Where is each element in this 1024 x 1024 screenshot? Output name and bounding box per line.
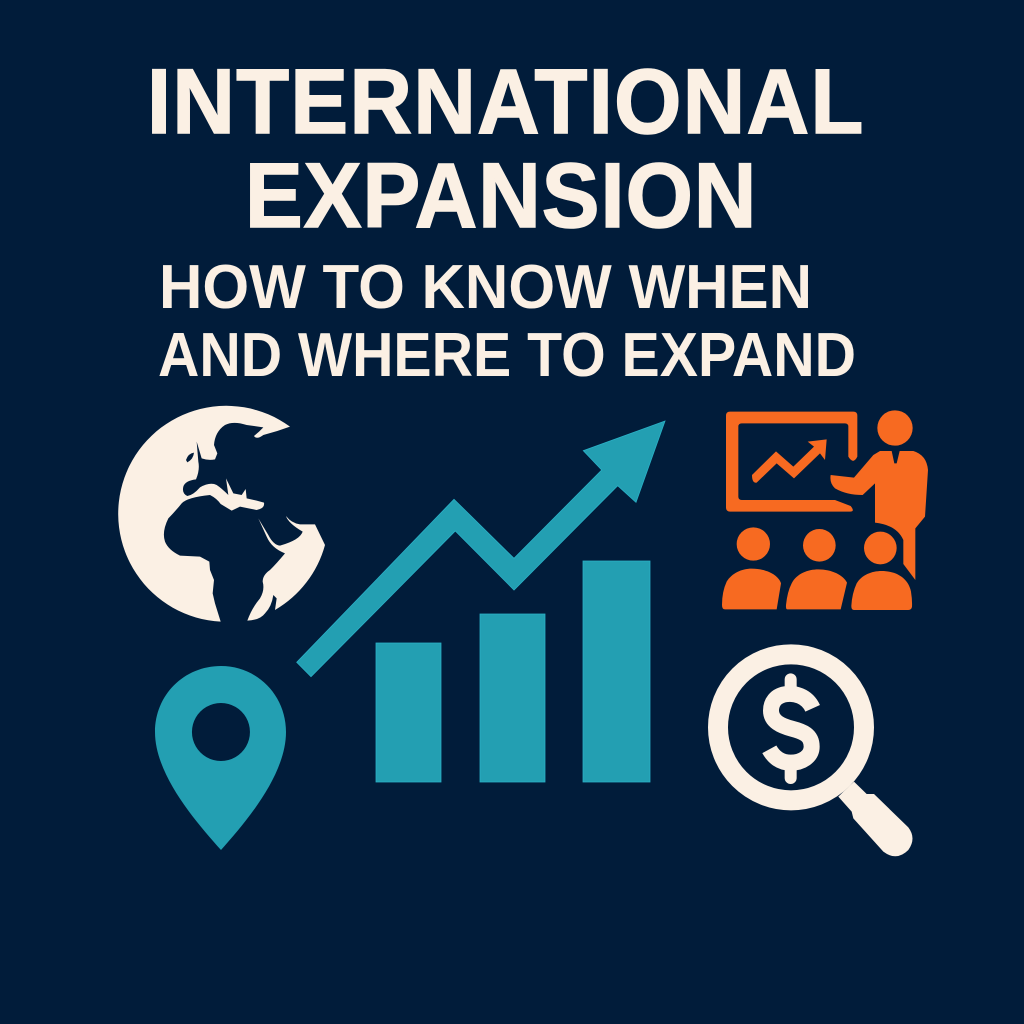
subtitle: AND WHERE TO EXPAND — [158, 321, 856, 390]
audience member 3 — [864, 532, 897, 564]
magnifier handle — [838, 782, 912, 856]
board trend arrow — [752, 439, 827, 483]
title: INTERNATIONAL — [147, 50, 863, 153]
subtitle: HOW TO KNOW WHEN — [159, 253, 812, 322]
bar 3 — [583, 561, 650, 782]
title: EXPANSION — [245, 144, 756, 247]
icon: location pin — [155, 666, 286, 850]
audience member 1 — [737, 527, 770, 561]
presentation board — [726, 412, 857, 512]
trend arrow — [297, 421, 665, 677]
icon: globe — [118, 406, 325, 622]
bar 1 — [376, 643, 441, 782]
icon: presenter with audience — [722, 410, 928, 610]
subtitle — [158, 253, 856, 390]
bar 2 — [480, 614, 545, 782]
dollar sign — [769, 679, 813, 778]
audience member 2 — [803, 529, 836, 562]
icon: magnifying glass with dollar sign — [718, 654, 912, 856]
chart: rising bars with arrow — [297, 421, 665, 782]
title — [147, 50, 863, 247]
presenter — [877, 410, 913, 446]
